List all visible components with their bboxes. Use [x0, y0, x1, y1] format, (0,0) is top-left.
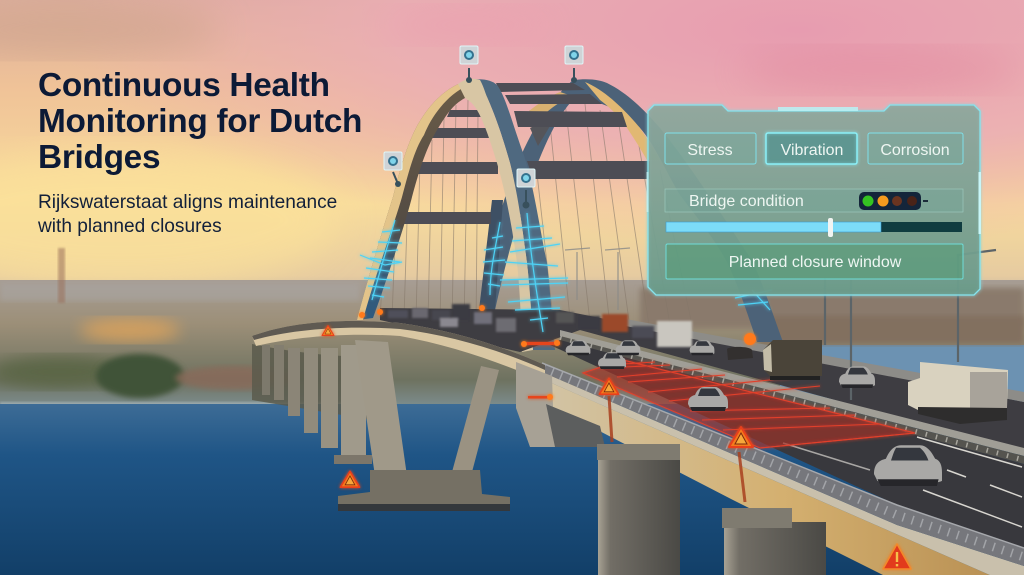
tab: stress	[665, 133, 756, 164]
title	[38, 67, 362, 176]
median guard rail	[560, 330, 1024, 464]
arch: front	[357, 79, 555, 352]
subtitle: with planned closures	[37, 216, 222, 237]
distant shoreline and city	[0, 248, 1024, 408]
planned closure window: Planned closure window	[729, 254, 902, 271]
warning triangles	[322, 326, 911, 569]
near lane vehicles	[566, 340, 1008, 486]
street lamps behind deck	[565, 248, 630, 310]
structural sensors	[384, 46, 583, 208]
left approach span with piers	[252, 344, 372, 464]
near carriageway	[548, 340, 1024, 550]
cyan vibration waves	[360, 213, 772, 332]
tab: vibration	[766, 133, 857, 164]
arch legs, footing and abutment	[338, 340, 605, 511]
subtitle: Rijkswaterstaat aligns maintenance	[38, 192, 337, 213]
water	[0, 404, 1024, 575]
tab: stress: Stress	[687, 142, 733, 159]
subtitle	[37, 192, 337, 237]
lamp posts	[825, 250, 996, 400]
arch: rear	[479, 79, 783, 342]
far carriageway and traffic	[380, 304, 1024, 452]
title: Continuous Health	[38, 67, 330, 104]
tab: vibration: Vibration	[781, 142, 843, 159]
left deck with guard rail	[252, 321, 545, 382]
bridge condition row: Bridge condition	[689, 193, 804, 210]
road lane markings	[783, 437, 1022, 527]
title: Monitoring for Dutch	[38, 103, 362, 140]
cross beams	[400, 83, 650, 224]
title: Bridges	[38, 139, 160, 176]
condition slider	[666, 218, 962, 237]
near deck fascia, rail and stains	[540, 363, 1024, 575]
tab: corrosion: Corrosion	[880, 142, 950, 159]
bridge condition row	[665, 189, 963, 212]
panel: monitoring dashboard	[646, 105, 981, 295]
tab: corrosion	[868, 133, 963, 164]
hot spots	[359, 305, 756, 400]
traffic light indicator	[859, 192, 928, 210]
sky background	[0, 0, 1024, 300]
bridge hangers	[380, 100, 695, 340]
planned closure window	[666, 244, 963, 279]
piers	[597, 444, 826, 575]
red road closure grid	[583, 360, 915, 448]
